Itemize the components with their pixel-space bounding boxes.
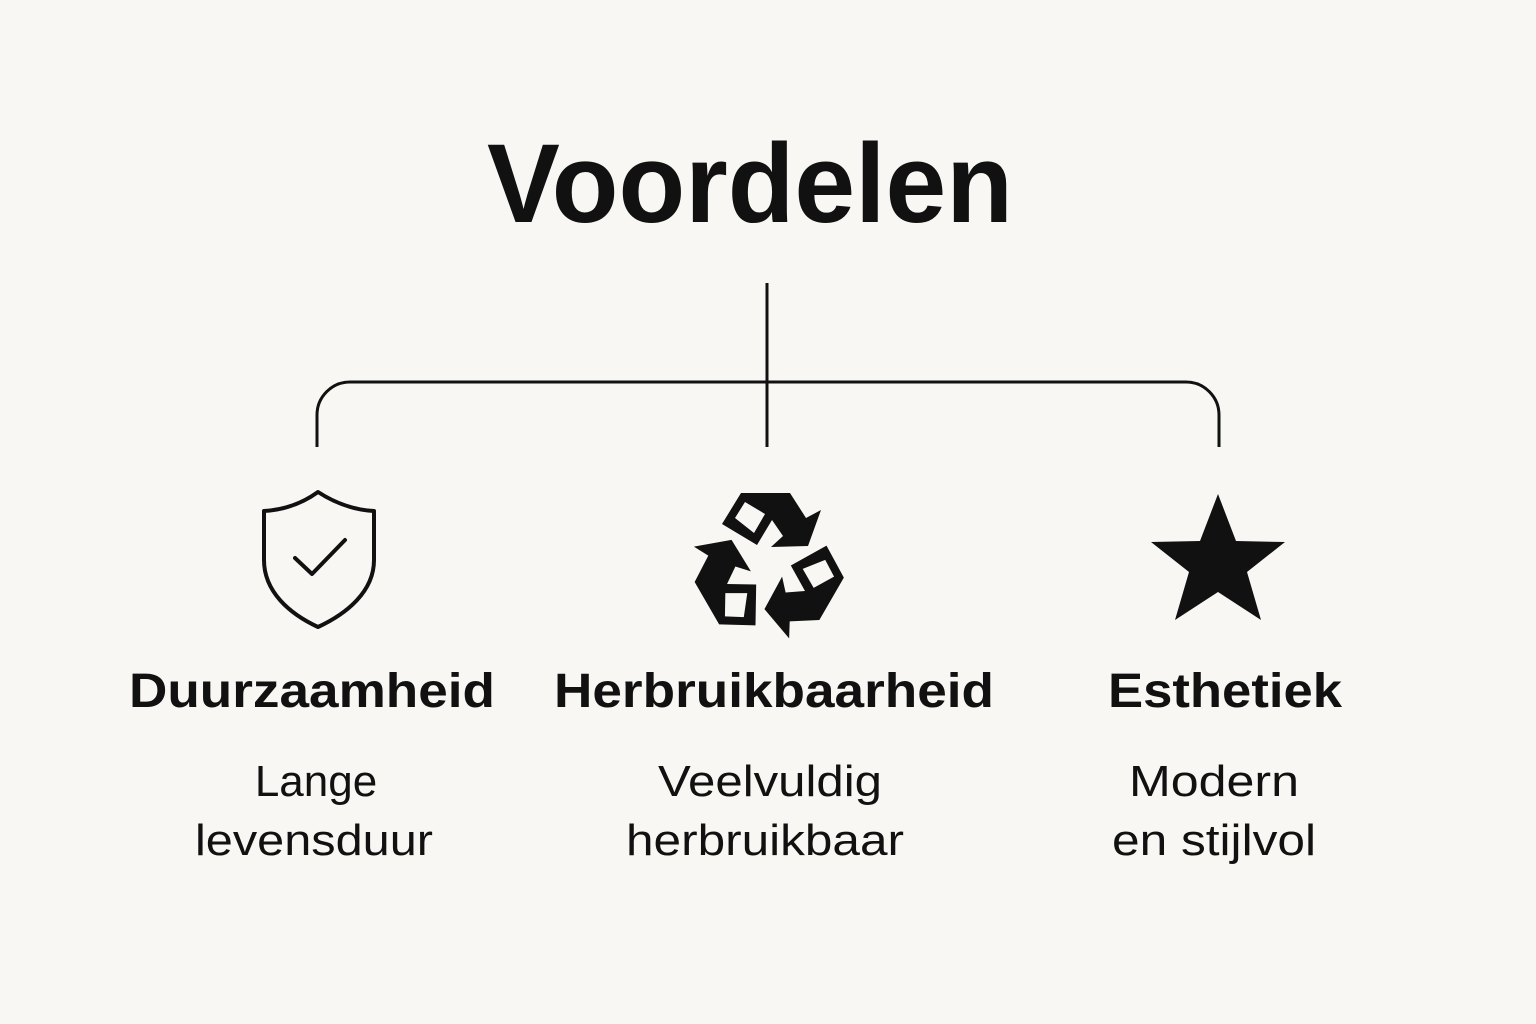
icon: star [1151,494,1285,620]
column: Herbruikbaarheid: herbruikbaar [626,816,904,865]
column: Herbruikbaarheid: Veelvuldig [658,757,882,806]
connector tree [317,283,1219,447]
column: Esthetiek: Modern [1129,757,1299,806]
column: Duurzaamheid [129,665,495,865]
column: Herbruikbaarheid: Herbruikbaarheid [554,665,994,718]
column: Herbruikbaarheid [554,665,994,865]
column: Esthetiek: en stijlvol [1112,816,1316,865]
title: Voordelen [487,121,1013,246]
icon: shield with check [264,492,374,627]
icon: recycle [679,493,853,647]
column: Duurzaamheid: Duurzaamheid [129,665,495,718]
column: Esthetiek: Esthetiek [1108,665,1342,718]
column: Duurzaamheid: levensduur [195,816,433,865]
column: Duurzaamheid: Lange [255,757,377,806]
column: Esthetiek [1108,665,1342,865]
